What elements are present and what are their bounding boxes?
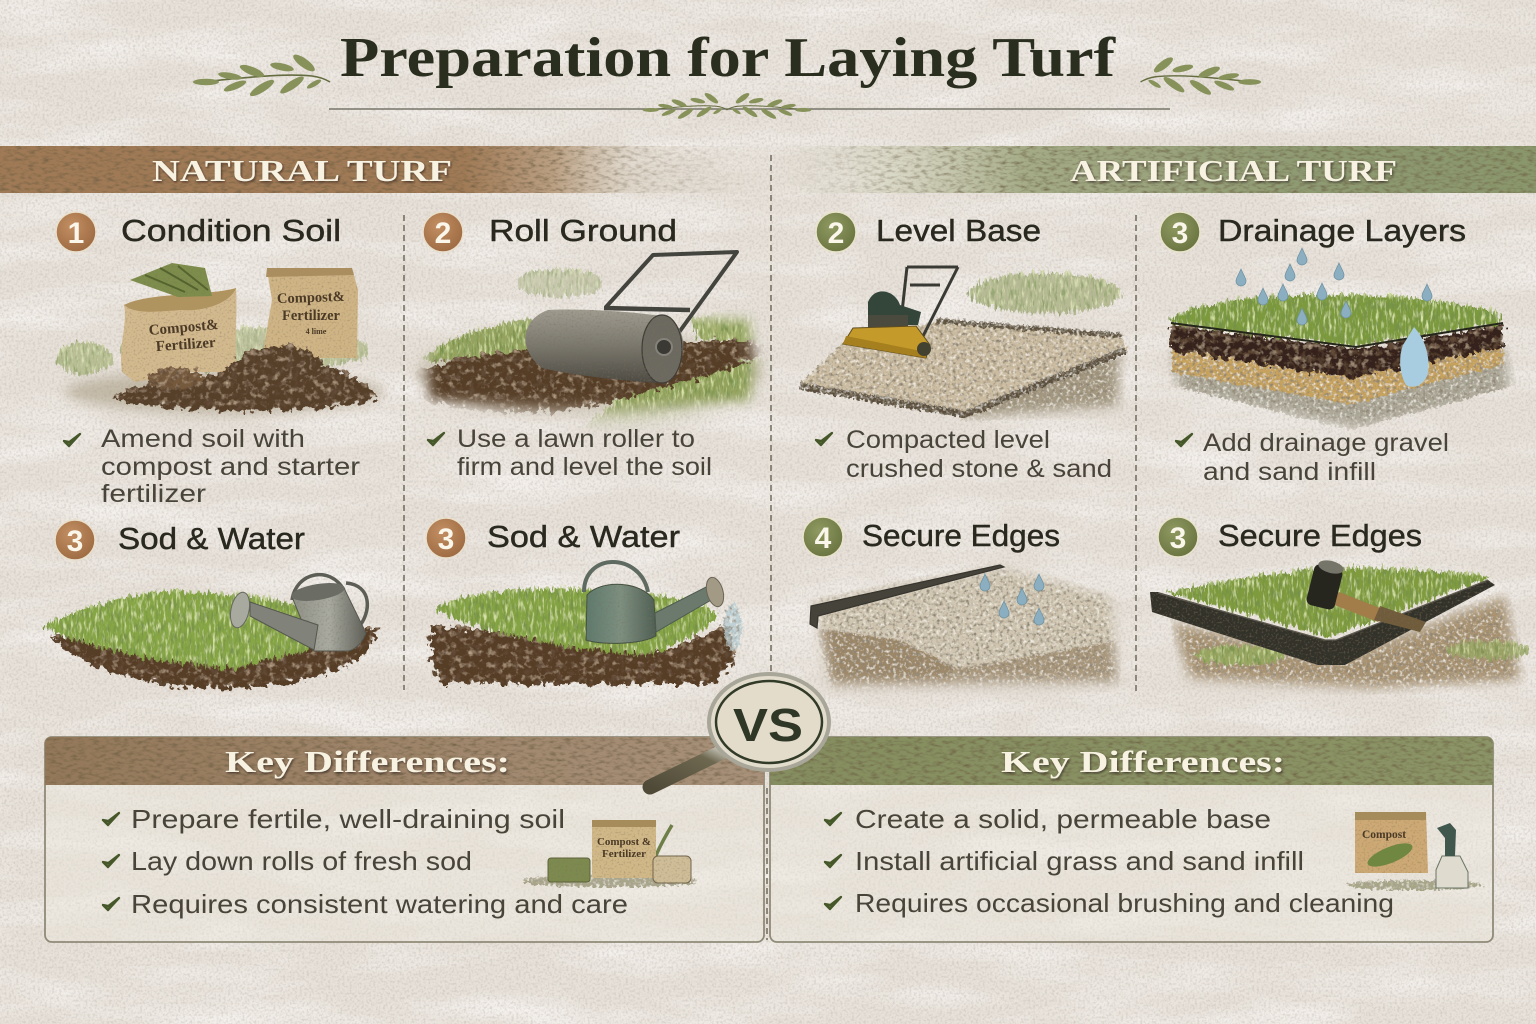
panel: step condition soil xyxy=(56,212,385,508)
illustration: sod with silver watering can xyxy=(44,575,378,688)
panel: step secure edges turf xyxy=(1150,517,1530,695)
panel: natural turf banner xyxy=(0,146,770,193)
panel: natural turf banner: NATURAL TURF xyxy=(152,153,452,188)
text: use a lawn roller xyxy=(428,425,712,481)
panel: step roll ground xyxy=(415,212,775,481)
step number: 3 xyxy=(1172,217,1188,250)
text: add drainage gravel xyxy=(1176,429,1449,486)
panel: step sod and water right xyxy=(426,518,742,684)
heading: Sod & Water xyxy=(118,521,305,556)
illustration: compost bag and spray bottle xyxy=(1347,812,1483,890)
bullet list: Requires occasional brushing and cleaning xyxy=(855,888,1394,918)
step number xyxy=(1160,212,1200,252)
heading: Condition Soil xyxy=(121,213,341,248)
panel: step drainage layers xyxy=(1160,212,1517,486)
step number xyxy=(803,517,843,557)
title block xyxy=(193,27,1261,120)
step number xyxy=(816,212,856,252)
step number: 2 xyxy=(435,217,451,250)
text: compacted level: Compacted level xyxy=(846,426,1050,454)
heading: Key Differences: xyxy=(225,744,510,779)
panel: step secure edges gravel xyxy=(803,517,1130,695)
panel: artificial turf banner: ARTIFICIAL TURF xyxy=(1070,153,1397,188)
heading: Secure Edges xyxy=(862,518,1060,553)
bullet list: Install artificial grass and sand infill xyxy=(855,846,1304,876)
illustration: framed turf with mallet xyxy=(1150,558,1530,695)
bullet list: Prepare fertile, well-draining soil xyxy=(131,804,565,834)
text: compacted level xyxy=(816,426,1112,483)
step number: 1 xyxy=(68,217,84,250)
illustration: compost bags and soil xyxy=(57,263,385,414)
illustration: compost products: Compost & xyxy=(597,836,651,848)
illustration: compost bags and soil: Compost& xyxy=(277,289,345,307)
text: use a lawn roller: firm and level the soil xyxy=(457,453,712,481)
magnifier lens: VS xyxy=(733,699,803,751)
illustration: compost bags and soil: Fertilizer xyxy=(282,308,341,324)
illustration: compost products xyxy=(522,820,698,887)
magnifier lens xyxy=(709,674,829,770)
illustration: sod with green watering can xyxy=(430,562,742,684)
icon: right sprig xyxy=(1141,55,1261,97)
illustration: compost bags and soil: Compost& xyxy=(148,317,219,339)
step number: 3 xyxy=(438,523,454,556)
divider with centre sprigs xyxy=(329,91,1170,120)
magnifier handle xyxy=(650,752,722,787)
illustration: compost products: Fertilizer xyxy=(602,848,646,860)
text: amend soil: fertilizer xyxy=(101,480,206,508)
bullet list xyxy=(103,804,628,919)
text: amend soil: Amend soil with xyxy=(101,425,305,453)
icon: VS magnifying glass xyxy=(650,674,829,787)
illustration: lawn roller xyxy=(415,252,775,430)
heading: Roll Ground xyxy=(489,213,677,248)
step number xyxy=(56,212,96,252)
title: Preparation for Laying Turf xyxy=(340,27,1117,89)
illustration: turf cross-section xyxy=(1166,248,1517,430)
illustration: plate compactor on base xyxy=(800,267,1127,420)
text: amend soil: compost and starter xyxy=(101,453,360,481)
illustration: compost bags and soil: 4 lime xyxy=(306,327,327,336)
panel: key differences natural xyxy=(45,737,764,942)
bullet list: Requires consistent watering and care xyxy=(131,889,628,919)
illustration: gravel bed with edging and drops xyxy=(805,560,1130,695)
step number xyxy=(1158,517,1198,557)
illustration: compost bags and soil: Fertilizer xyxy=(155,335,217,355)
icon: left sprig xyxy=(193,52,330,99)
step number: 3 xyxy=(67,525,83,558)
step number: 2 xyxy=(828,217,844,250)
text: amend soil xyxy=(64,425,360,508)
text: use a lawn roller: Use a lawn roller to xyxy=(457,425,695,453)
heading: Secure Edges xyxy=(1218,518,1422,553)
illustration: compost bag and spray bottle: Compost xyxy=(1362,829,1406,841)
panel: key differences artificial xyxy=(767,737,1493,942)
bullet list xyxy=(825,804,1394,918)
panel: step level base xyxy=(800,212,1127,483)
panel: artificial turf banner xyxy=(775,146,1536,193)
heading: Key Differences: xyxy=(1001,744,1285,779)
text: add drainage gravel: and sand infill xyxy=(1203,458,1376,486)
text: compacted level: crushed stone & sand xyxy=(846,455,1112,483)
heading: Drainage Layers xyxy=(1218,213,1466,248)
step number xyxy=(423,212,463,252)
heading: Sod & Water xyxy=(487,519,680,554)
step number xyxy=(426,518,466,558)
step number: 3 xyxy=(1170,522,1186,555)
step number xyxy=(55,520,95,560)
bullet list: Create a solid, permeable base xyxy=(855,804,1271,834)
panel: step sod and water left xyxy=(44,520,378,688)
heading: Level Base xyxy=(876,213,1041,248)
bullet list: Lay down rolls of fresh sod xyxy=(131,846,472,876)
step number: 4 xyxy=(815,522,832,555)
text: add drainage gravel: Add drainage gravel xyxy=(1203,429,1449,457)
